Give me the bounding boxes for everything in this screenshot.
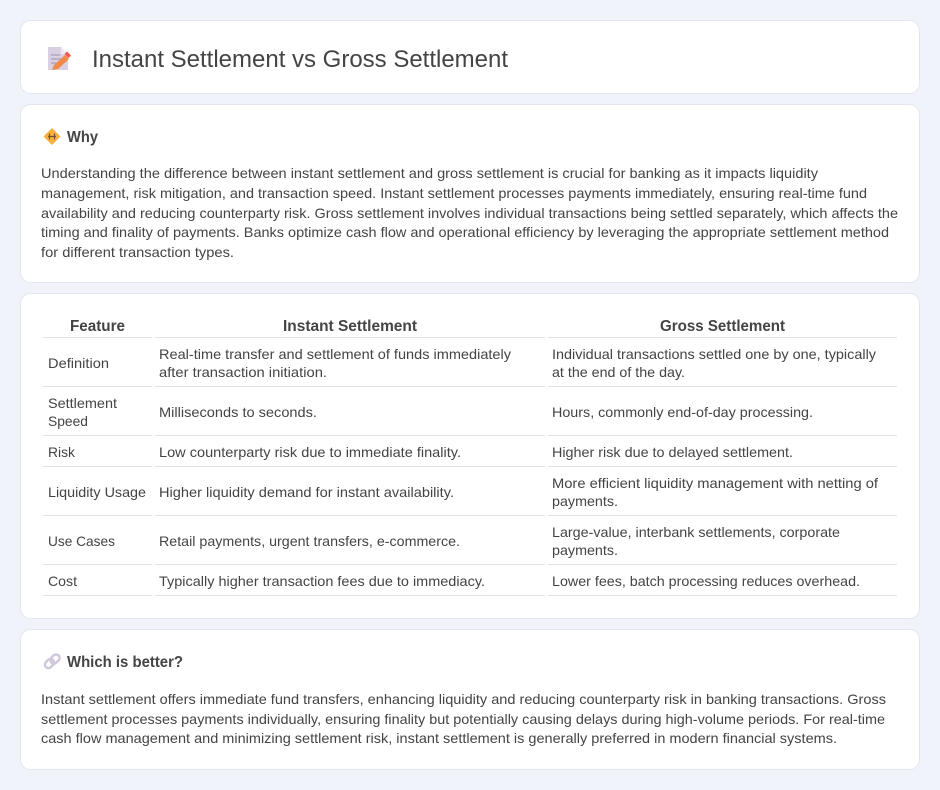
row: use cases: payments.: [552, 542, 618, 558]
row: cost: Cost: [48, 573, 77, 589]
row: cost: Typically higher transaction fees due to immediacy.: [159, 573, 485, 589]
row: liquidity usage: payments.: [552, 493, 618, 509]
row: liquidity usage: Higher liquidity demand for instant availability.: [159, 484, 454, 500]
row: settlement speed: Hours, commonly end-of-day processing.: [552, 404, 813, 420]
text block: which is better: Instant settlement offers immediate fund transfers, enhancing liquidity and reducing counterparty risk in banking transactions. Gross: [41, 691, 886, 707]
text block: why: Understanding the difference between instant settlement and gross settlement is crucial for banking as it impacts liquidity: [41, 165, 818, 181]
row: definition: Real-time transfer and settlement of funds immediately: [159, 346, 511, 362]
row: use cases: Large-value, interbank settlements, corporate: [552, 524, 840, 540]
text block: why: management, risk mitigation, and transaction speed. Instant settlement processes payments immediately, ensuring real-time fund: [41, 185, 867, 201]
heading: which is better: Which is better?: [67, 654, 183, 671]
row: risk: Low counterparty risk due to immediate finality.: [159, 444, 461, 460]
row: risk: Risk: [48, 444, 76, 460]
row: liquidity usage: Liquidity Usage: [48, 484, 146, 500]
heading: why: Why: [67, 129, 98, 146]
row: settlement speed: Settlement: [48, 395, 117, 411]
text block: which is better: [41, 691, 886, 746]
text block: why: [41, 165, 898, 260]
row: risk: [43, 444, 897, 466]
icon: diamond warning sign: [44, 129, 60, 144]
row: risk: Higher risk due to delayed settlement.: [552, 444, 793, 460]
icon: chain link: [43, 653, 61, 670]
row: definition: at the end of the day.: [552, 364, 685, 380]
title: Instant Settlement vs Gross Settlement: [92, 46, 508, 73]
panel: why: [20, 104, 920, 282]
row: definition: Individual transactions settled one by one, typically: [552, 346, 876, 362]
panel: header: [20, 20, 920, 94]
row: definition: Definition: [48, 355, 109, 371]
table header: [43, 318, 897, 338]
text block: why: for different transaction types.: [41, 244, 234, 260]
panel: comparison table: [20, 294, 920, 618]
row: liquidity usage: More efficient liquidity management with netting of: [552, 475, 878, 491]
row: cost: [43, 573, 897, 596]
row: settlement speed: [43, 395, 897, 436]
text block: which is better: settlement processes payments individually, ensuring finality but potentially causing delays during high-volume periods. For real-time: [41, 711, 885, 727]
row: settlement speed: Speed: [48, 413, 88, 429]
row: settlement speed: Milliseconds to seconds.: [159, 404, 317, 420]
text block: why: availability and reducing counterparty risk. Gross settlement involves individual transactions being settled separately, which affects the: [41, 205, 898, 221]
text block: why: timing and finality of payments. Banks optimize cash flow and operational efficiency by leveraging the appropriate settlement method: [41, 224, 889, 240]
row: definition: [43, 346, 897, 386]
panel: which is better: [20, 630, 920, 770]
icon: document with pencil: [48, 47, 71, 70]
row: cost: Lower fees, batch processing reduces overhead.: [552, 573, 860, 589]
text block: which is better: cash flow management and minimizing settlement risk, instant settlement is generally preferred in modern financial systems.: [41, 730, 837, 746]
row: liquidity usage: [43, 475, 897, 516]
table header: Feature: [70, 318, 125, 335]
row: use cases: Retail payments, urgent transfers, e-commerce.: [159, 533, 460, 549]
table header: Instant Settlement: [283, 318, 418, 335]
row: use cases: [43, 524, 897, 564]
row: use cases: Use Cases: [48, 533, 115, 549]
row: definition: after transaction initiation.: [159, 364, 327, 380]
table header: Gross Settlement: [660, 318, 786, 335]
